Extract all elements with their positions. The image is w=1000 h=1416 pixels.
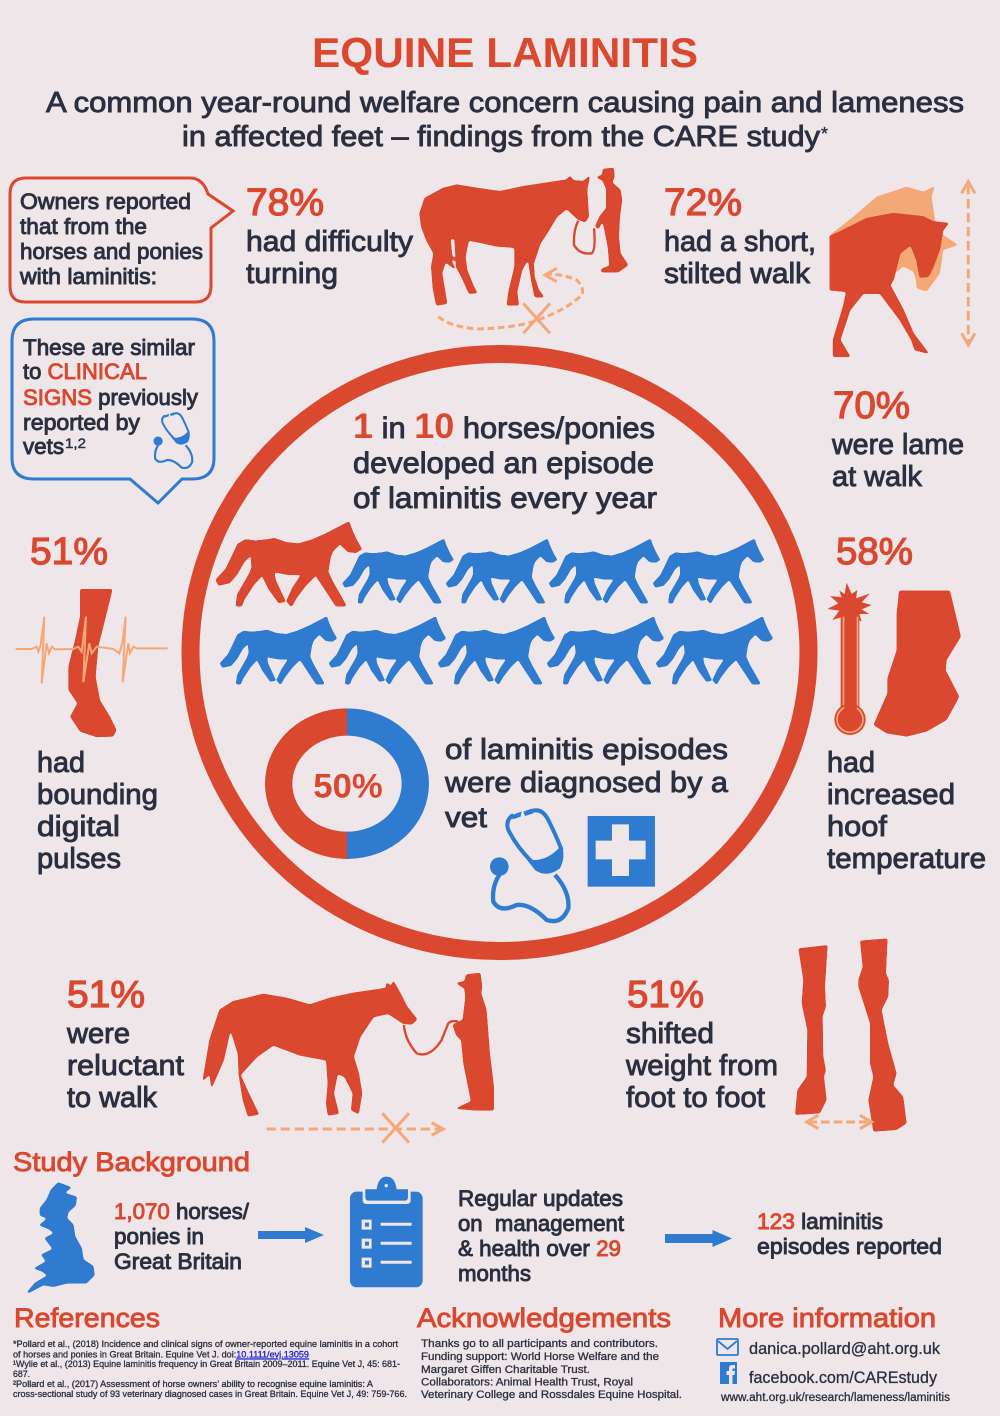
stat: 51% reluctant to walk: 51% xyxy=(67,974,145,1016)
icon: facebook xyxy=(720,1362,737,1384)
callout: clinical signs: 1,2 xyxy=(65,435,86,451)
text: 1,070 horses: 1,070 horses/ xyxy=(114,1199,250,1224)
illustration: leg with pulse line xyxy=(16,589,168,737)
icon: map of Great Britain xyxy=(28,1183,94,1293)
text: regular updates xyxy=(458,1186,624,1286)
callout: clinical signs: These are similar xyxy=(23,335,195,360)
illustration: two legs shifting weight xyxy=(795,938,907,1132)
subtitle xyxy=(46,87,964,153)
callout: owners reported xyxy=(10,178,233,302)
text: 1,070 horses xyxy=(114,1199,250,1274)
text: regular updates: months xyxy=(458,1261,531,1286)
more information: More information xyxy=(718,1303,936,1333)
pictogram: ten horses, one red xyxy=(217,523,772,683)
callout: owners reported: horses and ponies xyxy=(20,239,203,264)
stat: 72% short walk: stilted walk xyxy=(664,258,811,290)
stat: 51% bounding digital pulses: digital xyxy=(37,811,120,843)
stat: 70% lame at walk: were lame xyxy=(831,429,964,461)
icon: medical cross xyxy=(588,816,655,887)
illustration: horse turning with handler xyxy=(420,168,628,333)
stat: 51% shifted weight xyxy=(625,974,778,1114)
stat: 58% increased hoof temperature: had xyxy=(827,747,875,779)
stat: 58% increased hoof temperature: 58% xyxy=(836,531,913,573)
central text: diagnosed by a vet xyxy=(444,734,729,834)
stat: 51% reluctant to walk: to walk xyxy=(67,1082,157,1114)
subtitle: A common year-round welfare concern causing pain and lameness xyxy=(46,87,964,119)
more information: www.aht.org.uk/research/lameness/laminitis xyxy=(720,1392,950,1404)
text: regular updates: on management xyxy=(458,1211,624,1236)
stat: 78% difficulty turning: 78% xyxy=(246,182,324,224)
acknowledgements: Collaborators: Animal Health Trust, Royal xyxy=(421,1376,633,1388)
stat: 70% lame at walk: 70% xyxy=(833,385,910,427)
icon: large stethoscope xyxy=(490,809,568,921)
donut chart: 50% xyxy=(265,708,429,859)
arrow: to episodes xyxy=(665,1230,732,1247)
more information: danica.pollard@aht.org.uk xyxy=(749,1339,940,1358)
central text: 1 in 10: 1 in 10 horses/ponies xyxy=(353,407,655,446)
stat: 72% short walk: 72% xyxy=(664,182,742,224)
references: ²Pollard et al., (2017) Assessment of horse owners’ ability to recognise equine laminitis: A xyxy=(13,1379,374,1390)
text: 1,070 horses: ponies in xyxy=(114,1224,204,1249)
title: EQUINE LAMINITIS xyxy=(312,29,698,76)
stat: 51% bounding digital pulses xyxy=(30,531,158,875)
stat: 51% reluctant to walk xyxy=(66,974,184,1114)
central text: 1 in 10 xyxy=(353,407,657,515)
stat: 58% increased hoof temperature xyxy=(827,531,986,875)
more information xyxy=(717,1303,950,1404)
stat: 51% shifted weight: 51% xyxy=(627,974,704,1016)
subtitle: * xyxy=(821,124,828,144)
callout: clinical signs: vets xyxy=(23,434,64,459)
stat: 51% bounding digital pulses: pulses xyxy=(37,843,121,875)
stat: 70% lame at walk: at walk xyxy=(832,461,922,493)
references: of horses and ponies in Great Britain. Equine Vet J. doi:10.1111/evj.13059 xyxy=(13,1350,309,1360)
references: ¹Wylie et al., (2013) Equine laminitis frequency in Great Britain 2009–2011. Equine Vet J, 45: 681- xyxy=(13,1359,400,1370)
stat: 51% bounding digital pulses: bounding xyxy=(37,779,158,811)
icon: small stethoscope xyxy=(153,412,192,468)
callout: owners reported: with laminitis: xyxy=(19,264,157,289)
illustration: thermometer and hoof xyxy=(827,583,961,737)
stat: 72% short walk: had a short, xyxy=(664,226,816,258)
stat: 78% difficulty turning: turning xyxy=(246,258,338,290)
icon: clipboard xyxy=(350,1177,423,1287)
text: 123 episodes: episodes reported xyxy=(757,1234,942,1259)
text: 1,070 horses: Great Britain xyxy=(114,1249,242,1274)
text: 123 episodes xyxy=(757,1209,942,1259)
callout: clinical signs: reported by xyxy=(23,410,140,435)
stat: 51% shifted weight: weight from xyxy=(625,1050,778,1082)
stat: 51% shifted weight: foot to foot xyxy=(626,1082,765,1114)
stat: 51% reluctant to walk: were xyxy=(66,1018,130,1050)
central text: diagnosed by a vet: vet xyxy=(445,802,487,834)
stat: 70% lame at walk xyxy=(831,385,964,493)
stat: 51% shifted weight: shifted xyxy=(626,1018,714,1050)
acknowledgements: Veterinary College and Rossdales Equine Hospital. xyxy=(421,1389,682,1401)
acknowledgements xyxy=(417,1303,682,1401)
icon: envelope xyxy=(717,1339,738,1355)
callout: clinical signs: SIGNS previously xyxy=(23,385,198,410)
donut chart: 50%: 50% xyxy=(313,768,383,806)
text: regular updates: & health over 29 xyxy=(458,1236,621,1261)
references xyxy=(13,1303,407,1400)
central text: 1 in 10: of laminitis every year xyxy=(353,482,657,515)
stat: 51% reluctant to walk: reluctant xyxy=(67,1050,184,1082)
stat: 58% increased hoof temperature: increased xyxy=(827,779,955,811)
references: 687. xyxy=(13,1369,30,1380)
callout: owners reported: that from the xyxy=(20,214,147,239)
references: *Pollard et al., (2018) Incidence and clinical signs of owner-reported equine laminitis in a cohort xyxy=(13,1339,398,1350)
callout: owners reported: Owners reported xyxy=(20,189,191,214)
illustration: horse head bobbing xyxy=(830,182,975,357)
stat: 58% increased hoof temperature: temperature xyxy=(827,843,986,875)
references: cross-sectional study of 93 veterinary diagnosed cases in Great Britain. Equine Vet J, 49: 759-766. xyxy=(13,1389,407,1400)
central text: 1 in 10: developed an episode xyxy=(353,447,654,480)
stat: 78% difficulty turning: had difficulty xyxy=(246,226,414,258)
heading: study background: Study Background xyxy=(13,1147,250,1177)
stat: 58% increased hoof temperature: hoof xyxy=(827,811,888,843)
text: regular updates: Regular updates xyxy=(458,1186,623,1211)
acknowledgements: Funding support: World Horse Welfare and the xyxy=(421,1351,659,1363)
acknowledgements: Acknowledgements xyxy=(417,1303,671,1333)
stat: 78% difficulty turning xyxy=(246,182,414,290)
subtitle: in affected feet – findings from the CARE study xyxy=(182,121,821,153)
acknowledgements: Thanks go to all participants and contributors. xyxy=(421,1338,658,1350)
central text: diagnosed by a vet: of laminitis episodes xyxy=(445,734,728,766)
stat: 51% bounding digital pulses: had xyxy=(37,747,85,779)
stat: 51% bounding digital pulses: 51% xyxy=(30,531,108,573)
text: 123 episodes: 123 laminitis xyxy=(757,1209,883,1234)
callout: clinical signs xyxy=(12,319,214,503)
callout: clinical signs: to CLINICAL xyxy=(23,359,147,384)
illustration: horse refusing to walk with handler xyxy=(203,973,493,1143)
central text: diagnosed by a vet: were diagnosed by a xyxy=(444,767,729,799)
references: References xyxy=(14,1303,160,1333)
stat: 72% short walk xyxy=(664,182,816,290)
acknowledgements: Margaret Giffen Charitable Trust. xyxy=(421,1364,590,1376)
central circle xyxy=(190,354,808,951)
arrow: to clipboard xyxy=(258,1227,324,1243)
more information: facebook.com/CAREstudy xyxy=(749,1368,937,1387)
